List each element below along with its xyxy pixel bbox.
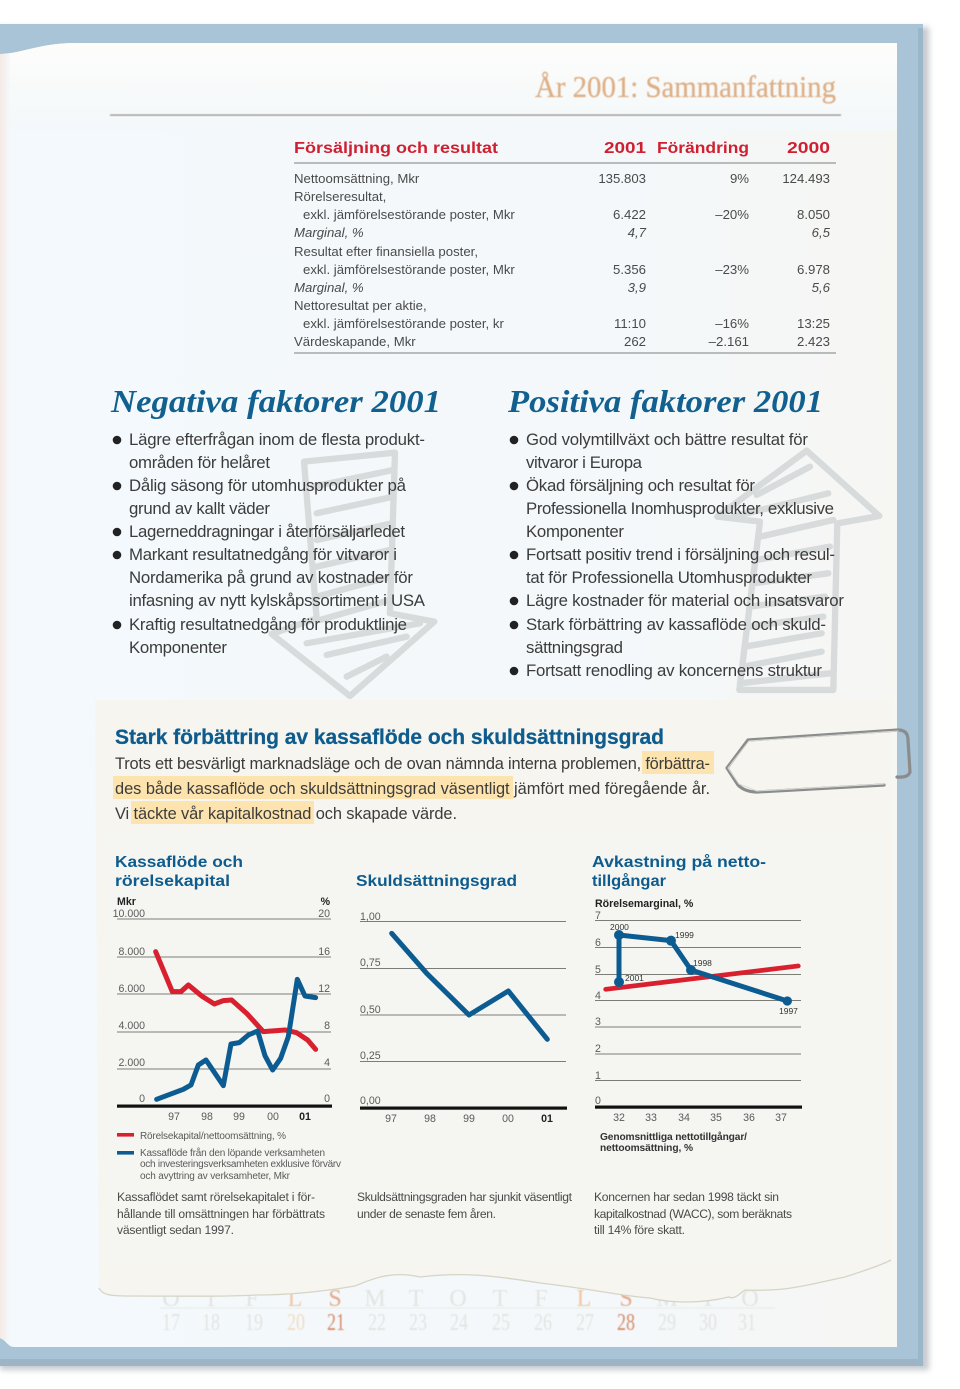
chart: debt ratio: 0,75 <box>360 957 381 969</box>
chart: return on net assets: 1 <box>595 1070 601 1082</box>
chart: return on net assets: 36 <box>743 1112 755 1124</box>
calendar strip: 31 <box>738 1310 756 1336</box>
calendar strip: 19 <box>245 1310 263 1336</box>
calendar strip: S <box>619 1286 633 1312</box>
calendar strip: 21 <box>327 1310 345 1336</box>
chart: cash flow and working capital: 2.000 <box>118 1057 145 1069</box>
caption: return <box>594 1190 792 1237</box>
caption: debt ratio: Skuldsättningsgraden har sjunkit väsentligt <box>357 1190 573 1204</box>
chart: cash flow and working capital: 20 <box>318 908 330 920</box>
heading: cash flow improvement: Stark förbättring av kassaflöde och skuldsättningsgrad <box>115 726 664 749</box>
table rows: 4,7 <box>628 225 647 240</box>
heading: negative factors: Negativa faktorer 2001 <box>110 383 441 419</box>
list: positive factors: Professionella Inomhusprodukter, exklusive <box>526 499 834 518</box>
table rows: Resultat efter finansiella poster, <box>294 244 478 259</box>
chart: cash flow and working capital: 98 <box>201 1111 213 1123</box>
table header: 2000 <box>787 140 830 157</box>
paragraph: summary: Trots ett besvärligt marknadsläge och de ovan nämnda interna problemen, förbättra- <box>115 755 710 773</box>
chart: cash flow and working capital: 97 <box>168 1111 180 1123</box>
list: negative factors: Markant resultatnedgång för vitvaror i <box>129 545 397 564</box>
list: negative factors: Dålig säsong för utomhusprodukter på <box>129 476 407 495</box>
table rows: 8.050 <box>797 207 830 222</box>
calendar strip: T <box>204 1286 219 1312</box>
chart: return on net assets: 2000 <box>610 922 629 932</box>
table rows: 6.978 <box>797 262 830 277</box>
chart: cash flow and working capital: 4.000 <box>118 1020 145 1032</box>
list: positive factors: vitvaror i Europa <box>526 453 643 472</box>
table rows: 124.493 <box>782 171 830 186</box>
calendar strip: 30 <box>699 1310 717 1336</box>
table rows: 11:10 <box>614 316 646 331</box>
table rows: exkl. jämförelsestörande poster, kr <box>303 316 504 331</box>
calendar strip: L <box>288 1286 302 1312</box>
red line: WACC <box>606 966 798 989</box>
list: positive factors: God volymtillväxt och bättre resultat för <box>526 430 808 449</box>
chart: cash flow and working capital: 8 <box>324 1020 330 1032</box>
caption: return: kapitalkostnad (WACC), som beräknats <box>594 1207 792 1221</box>
chart: cash flow and working capital: 99 <box>233 1111 245 1123</box>
icon: paper clip <box>727 730 910 792</box>
icon: up arrow sketch <box>717 451 879 690</box>
blue line: return <box>614 930 792 1006</box>
paragraph: summary <box>115 755 710 823</box>
legend: cash flow chart: och investeringsverksamheten exklusive förvärv <box>140 1159 341 1170</box>
calendar strip: 17 <box>162 1310 180 1336</box>
chart: return on net assets: 1998 <box>693 958 712 968</box>
caption: debt ratio: under de senaste fem åren. <box>357 1207 496 1221</box>
legend: cash flow chart: och avyttring av verksamheter, Mkr <box>140 1171 291 1182</box>
chart: return on net assets <box>595 898 802 1154</box>
table rows: 262 <box>624 334 646 349</box>
table rows: 6,5 <box>812 225 831 240</box>
table rows: exkl. jämförelsestörande poster, Mkr <box>303 262 515 277</box>
calendar strip: S <box>328 1286 342 1312</box>
table rows: –16% <box>715 316 749 331</box>
list: positive factors: Ökad försäljning och resultat för <box>526 476 755 495</box>
list: negative factors: Nordamerika på grund av kostnader för <box>129 568 413 587</box>
calendar strip: L <box>577 1286 591 1312</box>
calendar strip: 22 <box>368 1310 386 1336</box>
chart: return on net assets: Genomsnittliga nettotillgångar/ <box>600 1131 747 1143</box>
legend: cash flow chart: Rörelsekapital/nettoomsättning, % <box>140 1131 286 1142</box>
chart: cash flow and working capital: 0 <box>139 1093 145 1105</box>
caption: cash flow: hållande till omsättningen har förbättrats <box>117 1207 325 1221</box>
list: negative factors: Kraftig resultatnedgång för produktlinje <box>129 615 407 634</box>
list: negative factors: Komponenter <box>129 638 227 657</box>
table rows <box>294 171 836 354</box>
chart: return on net assets: 2 <box>595 1043 601 1055</box>
table rows: –20% <box>715 207 749 222</box>
chart: debt ratio: 99 <box>463 1113 475 1125</box>
heading: cash flow chart: rörelsekapital <box>115 873 230 890</box>
chart: debt ratio: 97 <box>385 1113 397 1125</box>
list: negative factors: Lagerneddragningar i återförsäljarledet <box>129 522 405 541</box>
chart: return on net assets: nettoomsättning, % <box>600 1143 693 1154</box>
chart: return on net assets: 34 <box>678 1112 690 1124</box>
list: positive factors: tat för Professionella Utomhusprodukter <box>526 568 812 587</box>
calendar strip: O <box>741 1286 759 1312</box>
table header: 2001 <box>604 140 646 157</box>
calendar strip: 20 <box>287 1310 305 1336</box>
list: positive factors: Komponenter <box>526 522 624 541</box>
list: positive factors: Fortsatt positiv trend i försäljning och resul- <box>526 545 835 564</box>
caption: return: till 14% före skatt. <box>594 1223 685 1237</box>
calendar strip: 28 <box>617 1310 635 1336</box>
chart: debt ratio: 0,25 <box>360 1050 381 1062</box>
chart: debt ratio: 1,00 <box>360 911 381 923</box>
calendar strip: T <box>701 1286 716 1312</box>
chart: debt ratio: 98 <box>424 1113 436 1125</box>
table rows: Nettoomsättning, Mkr <box>294 171 420 186</box>
calendar strip: F <box>245 1286 259 1312</box>
table rows: 3,9 <box>628 280 647 295</box>
caption: cash flow: väsentligt sedan 1997. <box>117 1223 234 1237</box>
chart: cash flow and working capital: Mkr <box>117 896 136 908</box>
chart: cash flow and working capital: 4 <box>324 1057 330 1069</box>
chart: return on net assets: 3 <box>595 1016 601 1028</box>
list: positive factors: Stark förbättring av kassaflöde och skuld- <box>526 615 826 634</box>
table header: Förändring <box>657 140 749 157</box>
chart: debt ratio: 0,50 <box>360 1004 381 1016</box>
chart: return on net assets: 33 <box>645 1112 657 1124</box>
table rows: Rörelseresultat, <box>294 189 386 204</box>
list: positive factors: sättningsgrad <box>526 638 623 657</box>
calendar strip: M <box>364 1286 386 1312</box>
table rows: 9% <box>730 171 749 186</box>
list: negative factors <box>113 430 426 657</box>
chart: cash flow and working capital: 8.000 <box>118 946 145 958</box>
icon: down arrow sketch <box>272 453 434 696</box>
caption: return: Koncernen har sedan 1998 täckt sin <box>594 1190 779 1204</box>
calendar strip: F <box>534 1286 548 1312</box>
heading: return chart: Avkastning på netto- <box>592 853 766 871</box>
panel: torn paper note <box>95 700 891 1302</box>
chart: cash flow and working capital: 6.000 <box>118 983 145 995</box>
blue line: cash flow <box>157 979 316 1099</box>
calendar strip: 18 <box>202 1310 220 1336</box>
list: negative factors: Lägre efterfrågan inom de flesta produkt- <box>129 430 425 449</box>
table rows: exkl. jämförelsestörande poster, Mkr <box>303 207 515 222</box>
heading: return chart: tillgångar <box>592 872 666 890</box>
chart: return on net assets: Rörelsemarginal, % <box>595 898 694 910</box>
table rows: –2.161 <box>709 334 749 349</box>
heading: cash flow chart <box>115 854 243 890</box>
chart: return on net assets: 35 <box>710 1112 722 1124</box>
title: År 2001: Sammanfattning <box>535 69 836 104</box>
chart: cash flow and working capital <box>113 896 332 1123</box>
caption: cash flow <box>117 1190 325 1237</box>
table rows: Marginal, % <box>294 280 364 295</box>
calendar strip: O <box>162 1286 180 1312</box>
list: positive factors: Fortsatt renodling av koncernens struktur <box>526 661 822 680</box>
calendar strip: 23 <box>409 1310 427 1336</box>
legend: cash flow chart: Kassaflöde från den löpande verksamheten <box>140 1147 325 1159</box>
chart: cash flow and working capital: 0 <box>324 1093 330 1105</box>
table header: Försäljning och resultat <box>294 140 499 157</box>
caption: debt ratio <box>357 1190 573 1221</box>
list: positive factors <box>510 430 844 680</box>
calendar strip: 25 <box>492 1310 510 1336</box>
heading: return chart <box>592 853 766 890</box>
chart: return on net assets: 6 <box>595 937 601 949</box>
table rows: 6.422 <box>613 207 646 222</box>
calendar strip: T <box>409 1286 424 1312</box>
caption: cash flow: Kassaflödet samt rörelsekapitalet i för- <box>117 1190 315 1204</box>
chart: debt ratio: 0,00 <box>360 1095 381 1107</box>
title rule <box>110 114 841 116</box>
chart: return on net assets: 32 <box>613 1112 625 1124</box>
paragraph: summary: Vi täckte vår kapitalkostnad och skapade värde. <box>115 805 457 823</box>
heading: positive factors: Positiva faktorer 2001 <box>507 383 823 419</box>
calendar strip <box>160 1286 775 1336</box>
calendar strip: M <box>656 1286 678 1312</box>
calendar strip: T <box>493 1286 508 1312</box>
red line: working capital <box>156 952 316 1049</box>
calendar strip: 26 <box>534 1310 552 1336</box>
chart: cash flow and working capital: 00 <box>267 1111 279 1123</box>
heading: cash flow chart: Kassaflöde och <box>115 854 243 871</box>
table: sales and results <box>294 140 836 354</box>
chart: cash flow and working capital: % <box>321 896 331 908</box>
chart: return on net assets: 4 <box>595 990 601 1002</box>
calendar strip: 24 <box>450 1310 468 1336</box>
chart: return on net assets: 37 <box>775 1112 787 1124</box>
calendar strip: O <box>449 1286 467 1312</box>
table rows: Värdeskapande, Mkr <box>294 334 416 349</box>
list: negative factors: infasning av nytt kylskåpssortiment i USA <box>129 591 426 610</box>
chart: return on net assets: 0 <box>595 1095 601 1107</box>
chart: debt ratio <box>360 911 567 1125</box>
chart: return on net assets: 2001 <box>625 973 644 983</box>
chart: cash flow and working capital: 12 <box>318 983 330 995</box>
chart: debt ratio: 01 <box>541 1113 553 1125</box>
chart: cash flow and working capital: 10.000 <box>113 908 145 920</box>
table rows: 135.803 <box>598 171 646 186</box>
highlight marks <box>113 751 714 824</box>
chart: cash flow and working capital: 16 <box>318 946 330 958</box>
table rows: 2.423 <box>797 334 830 349</box>
table rows: 13:25 <box>797 316 830 331</box>
chart: return on net assets: 1999 <box>675 930 694 940</box>
heading: debt ratio chart: Skuldsättningsgrad <box>356 873 517 890</box>
legend: cash flow chart <box>117 1131 341 1182</box>
chart: debt ratio: 00 <box>502 1113 514 1125</box>
calendar strip: 27 <box>576 1310 594 1336</box>
table rows: 5,6 <box>812 280 831 295</box>
table rows: –23% <box>715 262 749 277</box>
chart: return on net assets: 7 <box>595 910 601 922</box>
table rows: 5.356 <box>613 262 646 277</box>
table rows: Nettoresultat per aktie, <box>294 298 427 313</box>
paragraph: summary: des både kassaflöde och skuldsättningsgrad väsentligt jämfört med föregående år. <box>115 780 710 798</box>
table header <box>294 140 836 164</box>
list: positive factors: Lägre kostnader för material och insatsvaror <box>526 591 844 610</box>
list: negative factors: grund av kallt väder <box>129 499 270 518</box>
table rows: Marginal, % <box>294 225 364 240</box>
calendar strip: 29 <box>658 1310 676 1336</box>
chart: cash flow and working capital: 01 <box>299 1111 311 1123</box>
blue line: debt ratio <box>392 933 547 1039</box>
list: negative factors: områden för helåret <box>129 453 270 472</box>
chart: return on net assets: 5 <box>595 964 601 976</box>
chart: return on net assets: 1997 <box>779 1006 798 1016</box>
